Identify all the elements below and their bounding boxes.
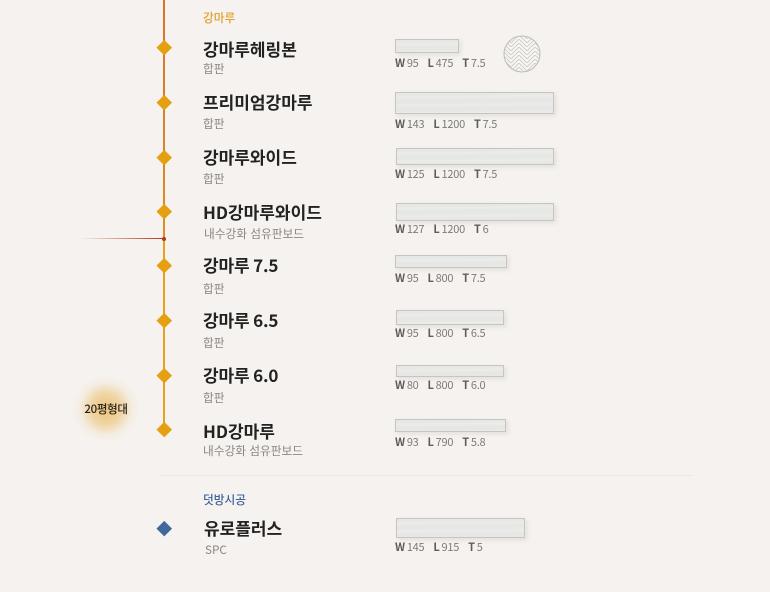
material: 합판 [203, 170, 225, 187]
row: HD강마루 [156, 418, 303, 459]
plank swatch: 강마루 6.5 [396, 310, 504, 325]
icon: herringbone pattern circle [504, 36, 540, 72]
section heading: 덧방시공: 덧방시공 [203, 491, 246, 508]
dimensions: 강마루와이드: W125 L1200 T7.5 [395, 166, 497, 182]
plank swatch: 유로플러스 [396, 518, 525, 538]
timeline upper segment [162, 0, 165, 238]
row: 강마루와이드 [156, 144, 297, 187]
product name: HD강마루와이드 [203, 199, 322, 224]
diamond marker [156, 312, 171, 327]
row: 강마루 6.0 [156, 362, 278, 406]
plank swatch: 강마루와이드 [396, 148, 554, 165]
diamond marker [156, 257, 171, 272]
material: 내수강화 섬유판보드 [204, 225, 304, 242]
material: 내수강화 섬유판보드 [203, 442, 303, 459]
diamond marker [156, 94, 171, 109]
row: 프리미엄강마루 [156, 89, 312, 132]
row: 유로플러스 [156, 515, 282, 558]
diamond marker [156, 367, 171, 382]
material: SPC [205, 541, 227, 558]
product name: 프리미엄강마루 [203, 89, 312, 114]
diamond marker [156, 203, 171, 218]
row: 강마루 6.5 [156, 307, 278, 351]
material: 합판 [203, 334, 225, 351]
section divider [160, 475, 693, 476]
material: 합판 [203, 389, 225, 406]
dimensions: 강마루 6.0: W80 L800 T6.0 [395, 377, 485, 393]
product name: HD강마루 [203, 418, 275, 443]
plank swatch: 강마루헤링본 [395, 39, 459, 53]
plank swatch: HD강마루와이드 [396, 203, 554, 221]
material: 합판 [203, 115, 225, 132]
row: HD강마루와이드 [156, 199, 322, 242]
dimensions: 강마루 7.5: W95 L800 T7.5 [395, 270, 485, 286]
timeline lower segment [162, 238, 165, 429]
material: 합판 [203, 60, 225, 77]
product name: 유로플러스 [204, 515, 282, 540]
plank swatch: 프리미엄강마루 [395, 92, 554, 114]
product name: 강마루 6.5 [203, 307, 278, 332]
20평형대 glow label: 20평형대 [84, 401, 128, 417]
product name: 강마루 6.0 [203, 362, 278, 387]
dimensions: 유로플러스: W145 L915 T5 [395, 539, 483, 555]
product name: 강마루 7.5 [203, 252, 278, 277]
plank swatch: HD강마루 [395, 419, 506, 432]
dimensions: HD강마루와이드: W127 L1200 T6 [395, 221, 488, 237]
diamond marker [156, 421, 171, 436]
dimensions: 강마루헤링본: W95 L475 T7.5 [395, 55, 485, 71]
product name: 강마루와이드 [203, 144, 297, 169]
material: 합판 [203, 280, 225, 297]
row: 강마루헤링본 [156, 36, 297, 77]
plank swatch: 강마루 7.5 [395, 255, 507, 268]
diamond marker [156, 149, 171, 164]
section heading: 강마루: 강마루 [203, 9, 235, 26]
dimensions: 강마루 6.5: W95 L800 T6.5 [395, 325, 485, 341]
diamond marker [157, 521, 172, 536]
row: 강마루 7.5 [156, 252, 278, 297]
plank swatch: 강마루 6.0 [396, 365, 504, 377]
20평형대 glow label [73, 376, 139, 442]
dimensions: 프리미엄강마루: W143 L1200 T7.5 [395, 116, 497, 132]
marker line pointing to timeline [80, 238, 163, 239]
marker dot [162, 236, 166, 240]
dimensions: HD강마루: W93 L790 T5.8 [395, 434, 485, 450]
product name: 강마루헤링본 [203, 36, 297, 61]
diamond marker [156, 39, 171, 54]
